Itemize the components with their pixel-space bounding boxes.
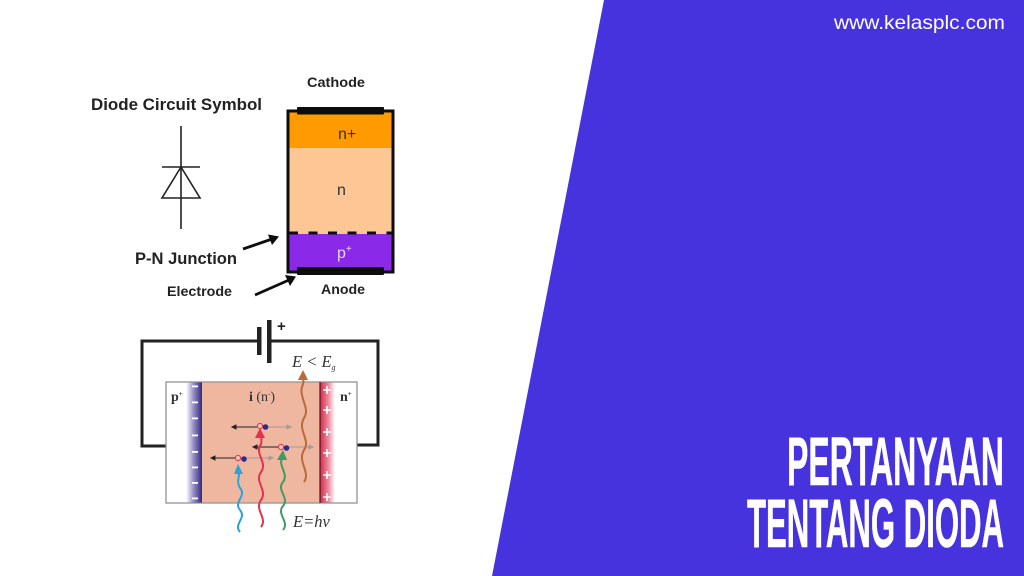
label: p+ region: p (171, 390, 179, 405)
layer: n+ (288, 111, 393, 148)
wavy photon: green (277, 450, 287, 530)
label: p+: + (346, 244, 352, 255)
layer: p+ (288, 234, 393, 271)
minus charges (192, 386, 198, 499)
label: electrode: Electrode (167, 283, 232, 299)
title (747, 423, 1004, 562)
label: intrinsic region: ) (270, 390, 275, 405)
anode electrode (297, 267, 384, 275)
icon: battery (257, 318, 286, 363)
circuit wire left (142, 341, 257, 446)
device outline (288, 111, 393, 272)
label: cathode: Cathode (307, 74, 365, 90)
wavy photon: blue (234, 464, 243, 532)
circuit wire right (269, 341, 378, 445)
device body (166, 382, 357, 503)
arrow: to electrode (255, 275, 296, 295)
label: p+ region: + (179, 390, 183, 398)
n region boundary (319, 382, 321, 503)
icon: diode symbol (162, 126, 200, 229)
heading: diode circuit symbol: Diode Circuit Symbol (91, 96, 262, 114)
label: n: n (337, 182, 346, 199)
carrier drift arrows: electrons right (247, 425, 313, 460)
p+ depletion edge (186, 382, 202, 502)
plus charges (323, 386, 331, 501)
electron-hole pairs (235, 423, 289, 462)
intrinsic region (202, 382, 320, 502)
junction dashed line (289, 232, 393, 234)
icon: battery: + (277, 318, 286, 335)
label: intrinsic region: i (n (249, 390, 268, 405)
wavy photon: orange (298, 370, 308, 482)
label: intrinsic region: - (268, 390, 271, 398)
label: n+ region: n (340, 390, 348, 405)
label: n+ region: + (348, 390, 352, 398)
n+ depletion edge (320, 382, 335, 502)
cathode electrode (297, 107, 384, 114)
wavy photon: red (255, 428, 265, 527)
label: p+: p (337, 245, 346, 262)
carrier drift arrows: holes left (211, 425, 278, 460)
label: E less than Eg: g (332, 363, 336, 372)
website url: www.kelasplc.com (833, 12, 1005, 34)
layer: n (288, 148, 393, 234)
arrow: to junction (243, 234, 279, 249)
purple diagonal panel (492, 0, 1024, 576)
photodiode circuit diagram (142, 318, 378, 532)
label: p-n junction: P-N Junction (135, 250, 237, 268)
label: anode: Anode (321, 281, 365, 297)
label: E less than Eg: E < E (292, 352, 332, 371)
diode structure diagram (91, 74, 393, 299)
label: E = h nu: E=hν (292, 512, 330, 531)
label: n+: n+ (338, 126, 356, 143)
